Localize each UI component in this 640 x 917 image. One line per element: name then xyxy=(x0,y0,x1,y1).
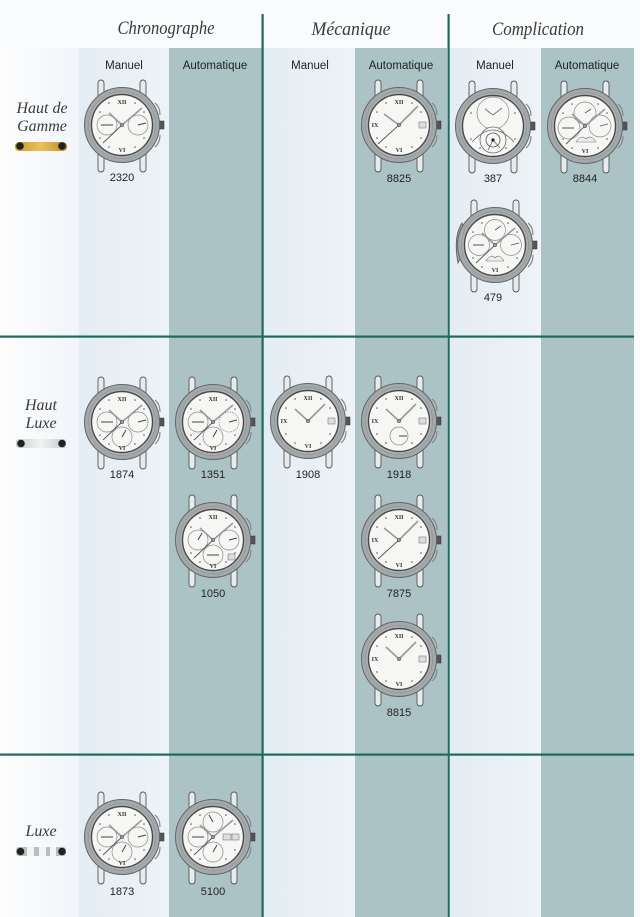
watch 1918 xyxy=(362,376,441,468)
number 1918: 1918 xyxy=(387,469,411,481)
number 7875: 7875 xyxy=(387,588,411,600)
row label: Luxe: Luxe xyxy=(24,823,57,840)
watch 8844: VI xyxy=(582,149,589,155)
sub-headings: Automatique xyxy=(369,60,433,72)
heading: Mécanique: Mécanique xyxy=(311,19,390,40)
number 8815: 8815 xyxy=(387,707,411,719)
watch 479: VI xyxy=(492,268,499,274)
watch 8825: VI xyxy=(396,148,403,154)
swatch: steel bar xyxy=(16,847,66,856)
sub-headings: Automatique xyxy=(183,60,247,72)
watch 1908: IX xyxy=(281,419,288,425)
watch 7875: IX xyxy=(372,538,379,544)
watch 1873: VI xyxy=(119,861,126,867)
number 1873: 1873 xyxy=(110,886,134,898)
heading: Complication: Complication xyxy=(492,19,584,40)
number 1874: 1874 xyxy=(110,469,134,481)
watch 1908 xyxy=(270,376,350,468)
sub-headings xyxy=(105,60,619,72)
left row-label column xyxy=(0,48,79,917)
row label: Haut Luxe: Haut xyxy=(24,397,58,414)
watch 1918: IX xyxy=(372,419,379,425)
number 387: 387 xyxy=(484,173,502,185)
number 1908: 1908 xyxy=(296,469,320,481)
watch 479 xyxy=(456,200,537,292)
watch 8815 xyxy=(362,614,441,706)
watch 387 xyxy=(456,81,535,173)
watch 1351 xyxy=(176,377,255,469)
watch 8844 xyxy=(548,81,627,173)
watch 1874: XII xyxy=(117,397,127,403)
watch 1050 xyxy=(176,495,255,587)
watch 1874: VI xyxy=(119,446,126,452)
watch 8825 xyxy=(362,80,441,172)
watch 1873 xyxy=(84,792,164,884)
number 8844: 8844 xyxy=(573,173,597,185)
row label: Haut de Gamme: Haut de xyxy=(15,100,68,117)
row label: Haut Luxe: Luxe xyxy=(24,415,57,432)
watch 7875: XII xyxy=(394,515,404,521)
watch 8815: VI xyxy=(396,682,403,688)
row label: Haut de Gamme xyxy=(15,100,68,135)
watch 1351: XII xyxy=(208,397,218,403)
watch 7875: VI xyxy=(396,563,403,569)
number 479: 479 xyxy=(484,292,502,304)
watch 5100 xyxy=(176,792,255,884)
watch 8825: IX xyxy=(372,123,379,129)
swatch: white bar xyxy=(16,439,66,448)
sub-headings: Manuel xyxy=(105,60,143,72)
watch 8815: XII xyxy=(394,634,404,640)
watch 1908: XII xyxy=(303,396,313,402)
watch 1351: VI xyxy=(210,446,217,452)
sub-headings: Manuel xyxy=(291,60,329,72)
number 5100: 5100 xyxy=(201,886,225,898)
watch 7875 xyxy=(362,495,441,587)
row label: Haut Luxe xyxy=(24,397,58,432)
watch 1873: XII xyxy=(117,812,127,818)
watch 2320 xyxy=(84,80,164,172)
watch 1918: XII xyxy=(394,396,404,402)
watch 2320: XII xyxy=(117,100,127,106)
watch 8815: IX xyxy=(372,657,379,663)
row label: Haut de Gamme: Gamme xyxy=(17,118,67,135)
watch 1908: VI xyxy=(305,444,312,450)
number 2320: 2320 xyxy=(110,172,134,184)
watch 1050: VI xyxy=(210,564,217,570)
sub-headings: Manuel xyxy=(476,60,514,72)
heading: Chronographe: Chronographe xyxy=(118,18,214,39)
number 1351: 1351 xyxy=(201,469,225,481)
watch 2320: VI xyxy=(119,148,126,154)
number 1050: 1050 xyxy=(201,588,225,600)
watch 1874 xyxy=(84,377,164,469)
sub-headings: Automatique xyxy=(555,60,619,72)
number 8825: 8825 xyxy=(387,173,411,185)
swatch: gold bar xyxy=(15,142,67,151)
watch 8825: XII xyxy=(394,100,404,106)
watch 1050: XII xyxy=(208,515,218,521)
